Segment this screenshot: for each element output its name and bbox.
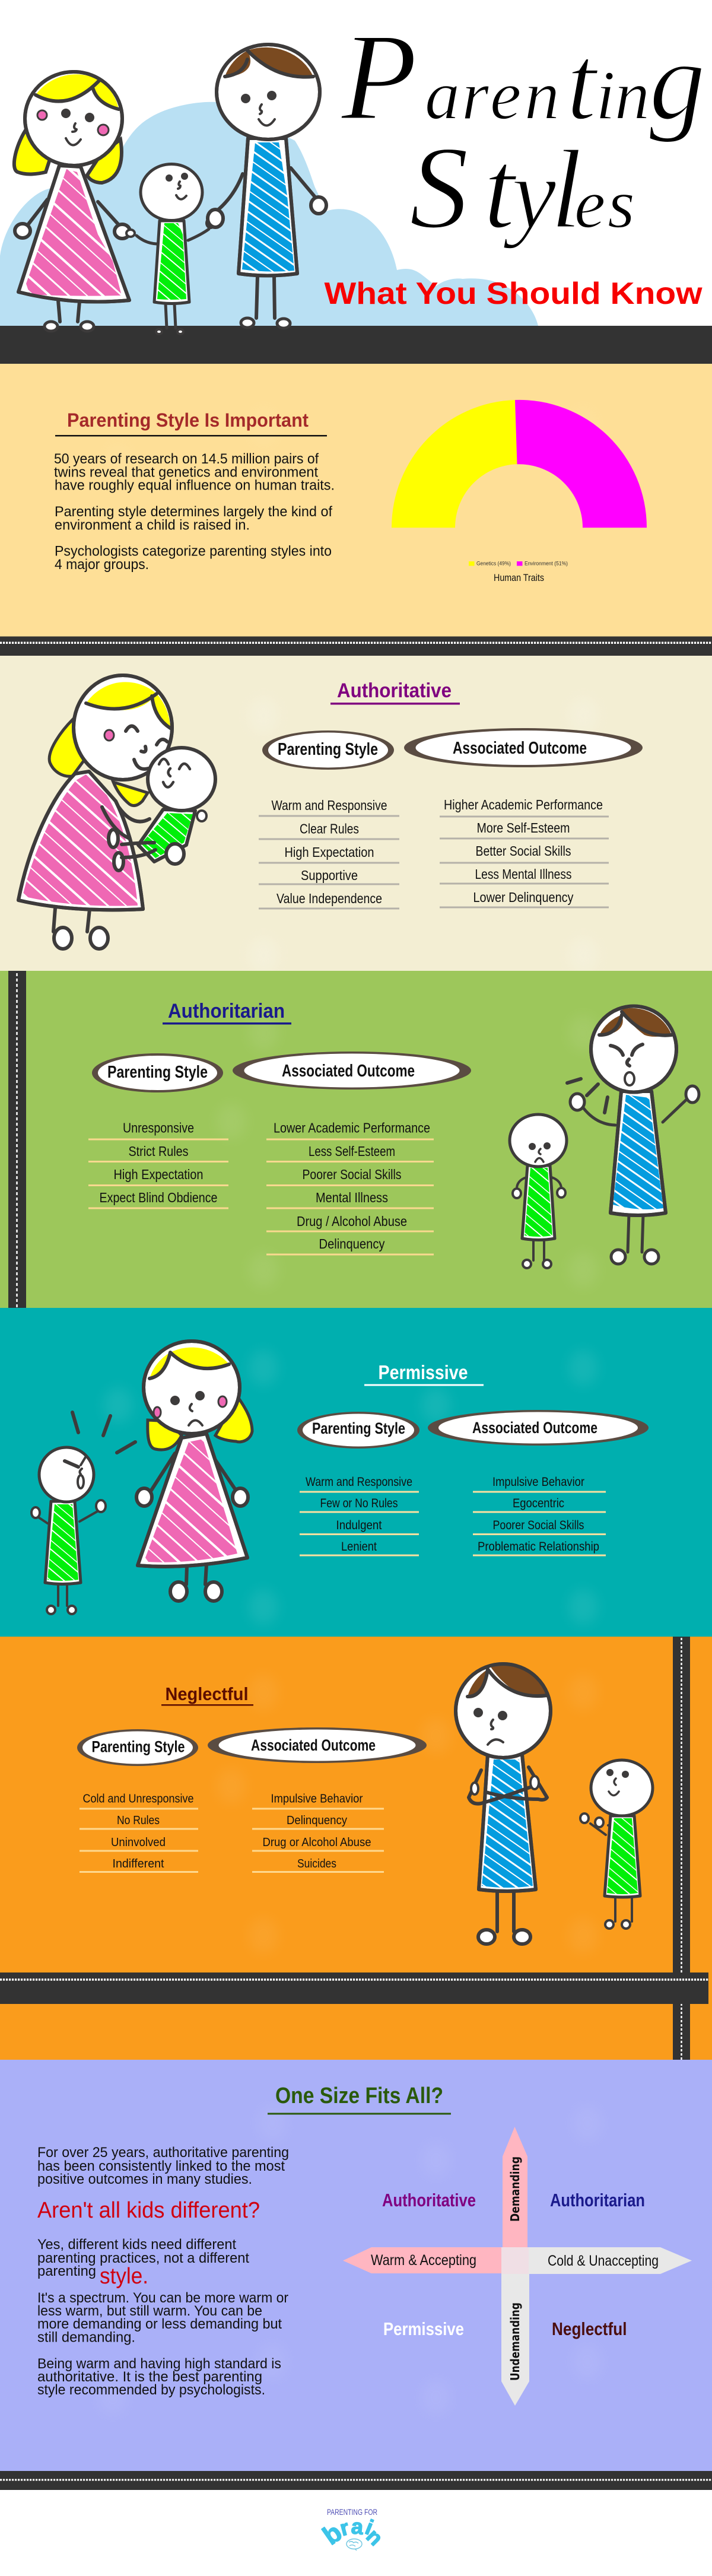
list: associated outcomes: Lower Academic Performance xyxy=(274,1120,430,1136)
list: parenting style traits xyxy=(80,1792,198,1873)
logo wordmark xyxy=(317,2514,388,2550)
text block: recommendation: authoritative. It is the best parenting xyxy=(37,2369,262,2385)
title: n xyxy=(525,56,560,134)
title: i xyxy=(596,56,615,134)
subtitle: What You Should Know xyxy=(324,277,703,311)
road: left vertical xyxy=(8,971,26,1308)
title: y xyxy=(503,138,557,249)
panel: one size fits all xyxy=(0,2060,712,2471)
badge: associated outcome: Associated Outcome xyxy=(251,1736,376,1754)
list: parenting style traits: Indifferent xyxy=(113,1857,164,1870)
character: sad child xyxy=(510,1114,567,1268)
logo wordmark: n xyxy=(361,2524,388,2550)
list: parenting style traits: Few or No Rules xyxy=(320,1497,398,1510)
heading: One Size Fits All? xyxy=(275,2083,443,2108)
list: associated outcomes: Egocentric xyxy=(513,1497,564,1510)
logo wordmark: a xyxy=(350,2514,365,2539)
text block: research summary: have roughly equal influence on human traits. xyxy=(55,478,335,494)
panel: authoritative xyxy=(0,656,712,973)
badge: parenting style: Parenting Style xyxy=(107,1063,208,1082)
chart legend: Genetics (49%) xyxy=(476,561,511,567)
text block: research finding: positive outcomes in many studies. xyxy=(37,2171,252,2187)
text block: research finding xyxy=(37,2145,289,2187)
list: associated outcomes: Delinquency xyxy=(287,1814,347,1827)
road divider xyxy=(0,636,712,656)
heading: Parenting Style Is Important xyxy=(67,409,309,431)
character: shouting child xyxy=(31,1412,135,1614)
list: parenting style traits xyxy=(259,798,399,909)
text block: different kids: parenting practices, not a different xyxy=(37,2250,249,2266)
text block: spectrum: less warm, but still warm. You can be xyxy=(37,2303,262,2319)
text block: spectrum xyxy=(37,2290,288,2345)
badge: parenting style: Parenting Style xyxy=(312,1419,405,1437)
icon: brain xyxy=(347,2539,362,2550)
character: reaching child xyxy=(580,1760,653,1929)
badge: associated outcome: Associated Outcome xyxy=(472,1419,597,1437)
road: right vertical xyxy=(673,1637,690,2060)
list: parenting style traits xyxy=(300,1475,419,1556)
list: associated outcomes xyxy=(440,797,609,908)
character: mother holding baby xyxy=(18,675,215,949)
text block: spectrum: still demanding. xyxy=(37,2330,135,2345)
arrow: warm and accepting xyxy=(343,2247,501,2273)
quadrant labels: Authoritative xyxy=(382,2190,476,2210)
text block: research summary: 50 years of research on 14.5 million pairs of xyxy=(54,451,319,467)
list: parenting style traits: Uninvolved xyxy=(111,1836,166,1849)
list: parenting style traits: Unresponsive xyxy=(123,1120,194,1136)
panel: authoritarian xyxy=(0,971,712,1308)
title: e xyxy=(574,165,605,243)
road: horizontal xyxy=(0,1973,708,2004)
title: e xyxy=(490,56,521,134)
list: parenting style traits: Warm and Responsive xyxy=(306,1475,412,1489)
list: parenting style traits xyxy=(88,1120,228,1209)
title: s xyxy=(608,165,635,243)
list: parenting style traits: High Expectation xyxy=(285,844,374,860)
chart: style quadrant cross xyxy=(343,2127,692,2406)
axis labels: Demanding xyxy=(508,2156,522,2222)
panel: neglectful xyxy=(0,1637,712,2060)
badge: associated outcome xyxy=(428,1410,649,1446)
text block: different kids xyxy=(37,2237,249,2289)
title: n xyxy=(615,56,650,134)
list: associated outcomes: Impulsive Behavior xyxy=(271,1792,363,1805)
badge: parenting style: Parenting Style xyxy=(91,1738,185,1755)
chart legend xyxy=(469,561,568,567)
list: associated outcomes: Less Self-Esteem xyxy=(309,1144,395,1159)
list: associated outcomes: Problematic Relationship xyxy=(478,1540,599,1554)
badge: parenting style xyxy=(92,1053,223,1092)
badge: associated outcome: Associated Outcome xyxy=(282,1062,415,1081)
quadrant labels: Authoritarian xyxy=(550,2190,645,2210)
list: parenting style traits: Clear Rules xyxy=(300,821,359,837)
heading: Permissive xyxy=(379,1361,468,1383)
list: associated outcomes: Less Mental Illness xyxy=(475,866,572,882)
heading: Authoritarian xyxy=(168,1000,285,1022)
character: father xyxy=(208,45,326,328)
list: associated outcomes: Higher Academic Performance xyxy=(444,797,603,812)
list: associated outcomes: Poorer Social Skills xyxy=(492,1519,584,1532)
character: shouting father xyxy=(567,1006,699,1264)
text block: spectrum: more demanding or less demanding but xyxy=(37,2316,282,2332)
text block: different kids: Yes, different kids need different xyxy=(37,2237,236,2253)
list: parenting style traits: Expect Blind Obdience xyxy=(100,1190,217,1205)
logo wordmark: i xyxy=(362,2515,377,2539)
title: t xyxy=(484,128,517,252)
badge: associated outcome: Associated Outcome xyxy=(453,739,587,758)
heading: Authoritative xyxy=(337,679,452,702)
list: parenting style traits: Strict Rules xyxy=(128,1144,189,1159)
text block: recommendation: Being warm and having high standard is xyxy=(37,2356,281,2372)
text block: research summary: twins reveal that genetics and environment xyxy=(54,464,318,480)
list: associated outcomes: Drug or Alcohol Abuse xyxy=(262,1836,371,1849)
road divider xyxy=(0,2471,712,2490)
list: associated outcomes: Impulsive Behavior xyxy=(492,1475,584,1489)
character: mother xyxy=(14,72,130,331)
list: parenting style traits: Indulgent xyxy=(336,1519,382,1532)
list: parenting style traits: Supportive xyxy=(301,868,358,883)
arrow: demanding xyxy=(503,2127,527,2247)
list: associated outcomes: Poorer Social Skills xyxy=(303,1167,401,1182)
text block: research summary xyxy=(54,451,335,573)
road band xyxy=(0,326,712,364)
cloud background xyxy=(0,102,538,326)
logo wordmark: b xyxy=(317,2518,347,2550)
badge: parenting style xyxy=(297,1412,419,1449)
character: worried mother xyxy=(136,1341,252,1601)
chart: half donut human traits xyxy=(392,400,647,583)
text block: different kids: style. xyxy=(100,2264,148,2289)
list: parenting style traits: No Rules xyxy=(117,1814,160,1827)
text block: different kids: parenting xyxy=(37,2263,96,2279)
chart legend: Environment (51%) xyxy=(525,561,568,567)
title: g xyxy=(649,19,705,144)
panel: hero header xyxy=(0,0,712,364)
logo: parenting for brain: PARENTING FOR xyxy=(327,2507,377,2517)
axis labels: Warm & Accepting xyxy=(371,2252,476,2269)
list: associated outcomes xyxy=(473,1475,606,1556)
badge: parenting style xyxy=(262,730,394,770)
axis labels: Undemanding xyxy=(508,2302,522,2381)
list: parenting style traits: Value Independence xyxy=(276,891,382,906)
title: a xyxy=(425,56,460,134)
arrow: undemanding xyxy=(501,2274,529,2406)
badge: associated outcome xyxy=(404,728,643,767)
text block: research finding: For over 25 years, authoritative parenting xyxy=(37,2145,289,2161)
quadrant labels: Neglectful xyxy=(552,2318,627,2339)
list: associated outcomes: Mental Illness xyxy=(316,1190,388,1205)
text block: research summary: 4 major groups. xyxy=(55,557,149,573)
quadrant labels: Permissive xyxy=(383,2318,464,2339)
title: l xyxy=(551,128,582,252)
badge: parenting style: Parenting Style xyxy=(278,740,378,759)
list: associated outcomes xyxy=(252,1792,384,1873)
text block: research summary: Parenting style determines largely the kind of xyxy=(55,504,332,520)
list: associated outcomes: Better Social Skills xyxy=(476,843,571,859)
title: S xyxy=(409,122,469,253)
list: parenting style traits: Cold and Unresponsive xyxy=(83,1792,193,1805)
list: associated outcomes: Lower Delinquency xyxy=(473,890,574,905)
text block: research summary: Psychologists categorize parenting styles into xyxy=(55,544,332,560)
panel: permissive xyxy=(0,1308,712,1637)
character: arms-crossed father xyxy=(456,1663,551,1944)
list: associated outcomes: Delinquency xyxy=(319,1236,385,1252)
arrow: cold and unaccepting xyxy=(529,2247,692,2274)
text block: research finding: has been consistently linked to the most xyxy=(37,2158,285,2174)
axis labels: Cold & Unaccepting xyxy=(548,2253,659,2269)
axis labels xyxy=(371,2156,659,2381)
chart title: Human Traits xyxy=(494,572,544,583)
subheading: aren't all kids different: Aren't all kids different? xyxy=(37,2198,260,2223)
quadrant labels xyxy=(382,2190,645,2339)
panel: parenting style is important xyxy=(0,364,712,637)
logo wordmark: r xyxy=(337,2515,351,2540)
title xyxy=(340,8,705,253)
list: parenting style traits: Lenient xyxy=(341,1540,377,1554)
list: associated outcomes: Drug / Alcohol Abuse xyxy=(297,1214,407,1229)
title: P xyxy=(340,8,417,146)
list: associated outcomes: Suicides xyxy=(297,1857,336,1870)
list: parenting style traits: Warm and Responsive xyxy=(272,798,387,813)
list: parenting style traits: High Expectation xyxy=(114,1167,203,1182)
text block: spectrum: It's a spectrum. You can be more warm or xyxy=(37,2290,288,2306)
logo: parenting for brain xyxy=(317,2507,388,2550)
heading: Neglectful xyxy=(165,1684,248,1704)
badge: parenting style xyxy=(77,1729,198,1766)
list: associated outcomes xyxy=(266,1120,434,1256)
character: child xyxy=(126,164,215,334)
title: r xyxy=(462,56,490,134)
badge: associated outcome xyxy=(208,1727,427,1763)
text block: recommendation xyxy=(37,2356,281,2398)
list: associated outcomes: More Self-Esteem xyxy=(477,820,570,836)
text block: research summary: environment a child is raised in. xyxy=(55,517,250,533)
title: t xyxy=(567,24,599,142)
badge: associated outcome xyxy=(233,1052,471,1090)
text block: recommendation: style recommended by psychologists. xyxy=(37,2382,265,2398)
